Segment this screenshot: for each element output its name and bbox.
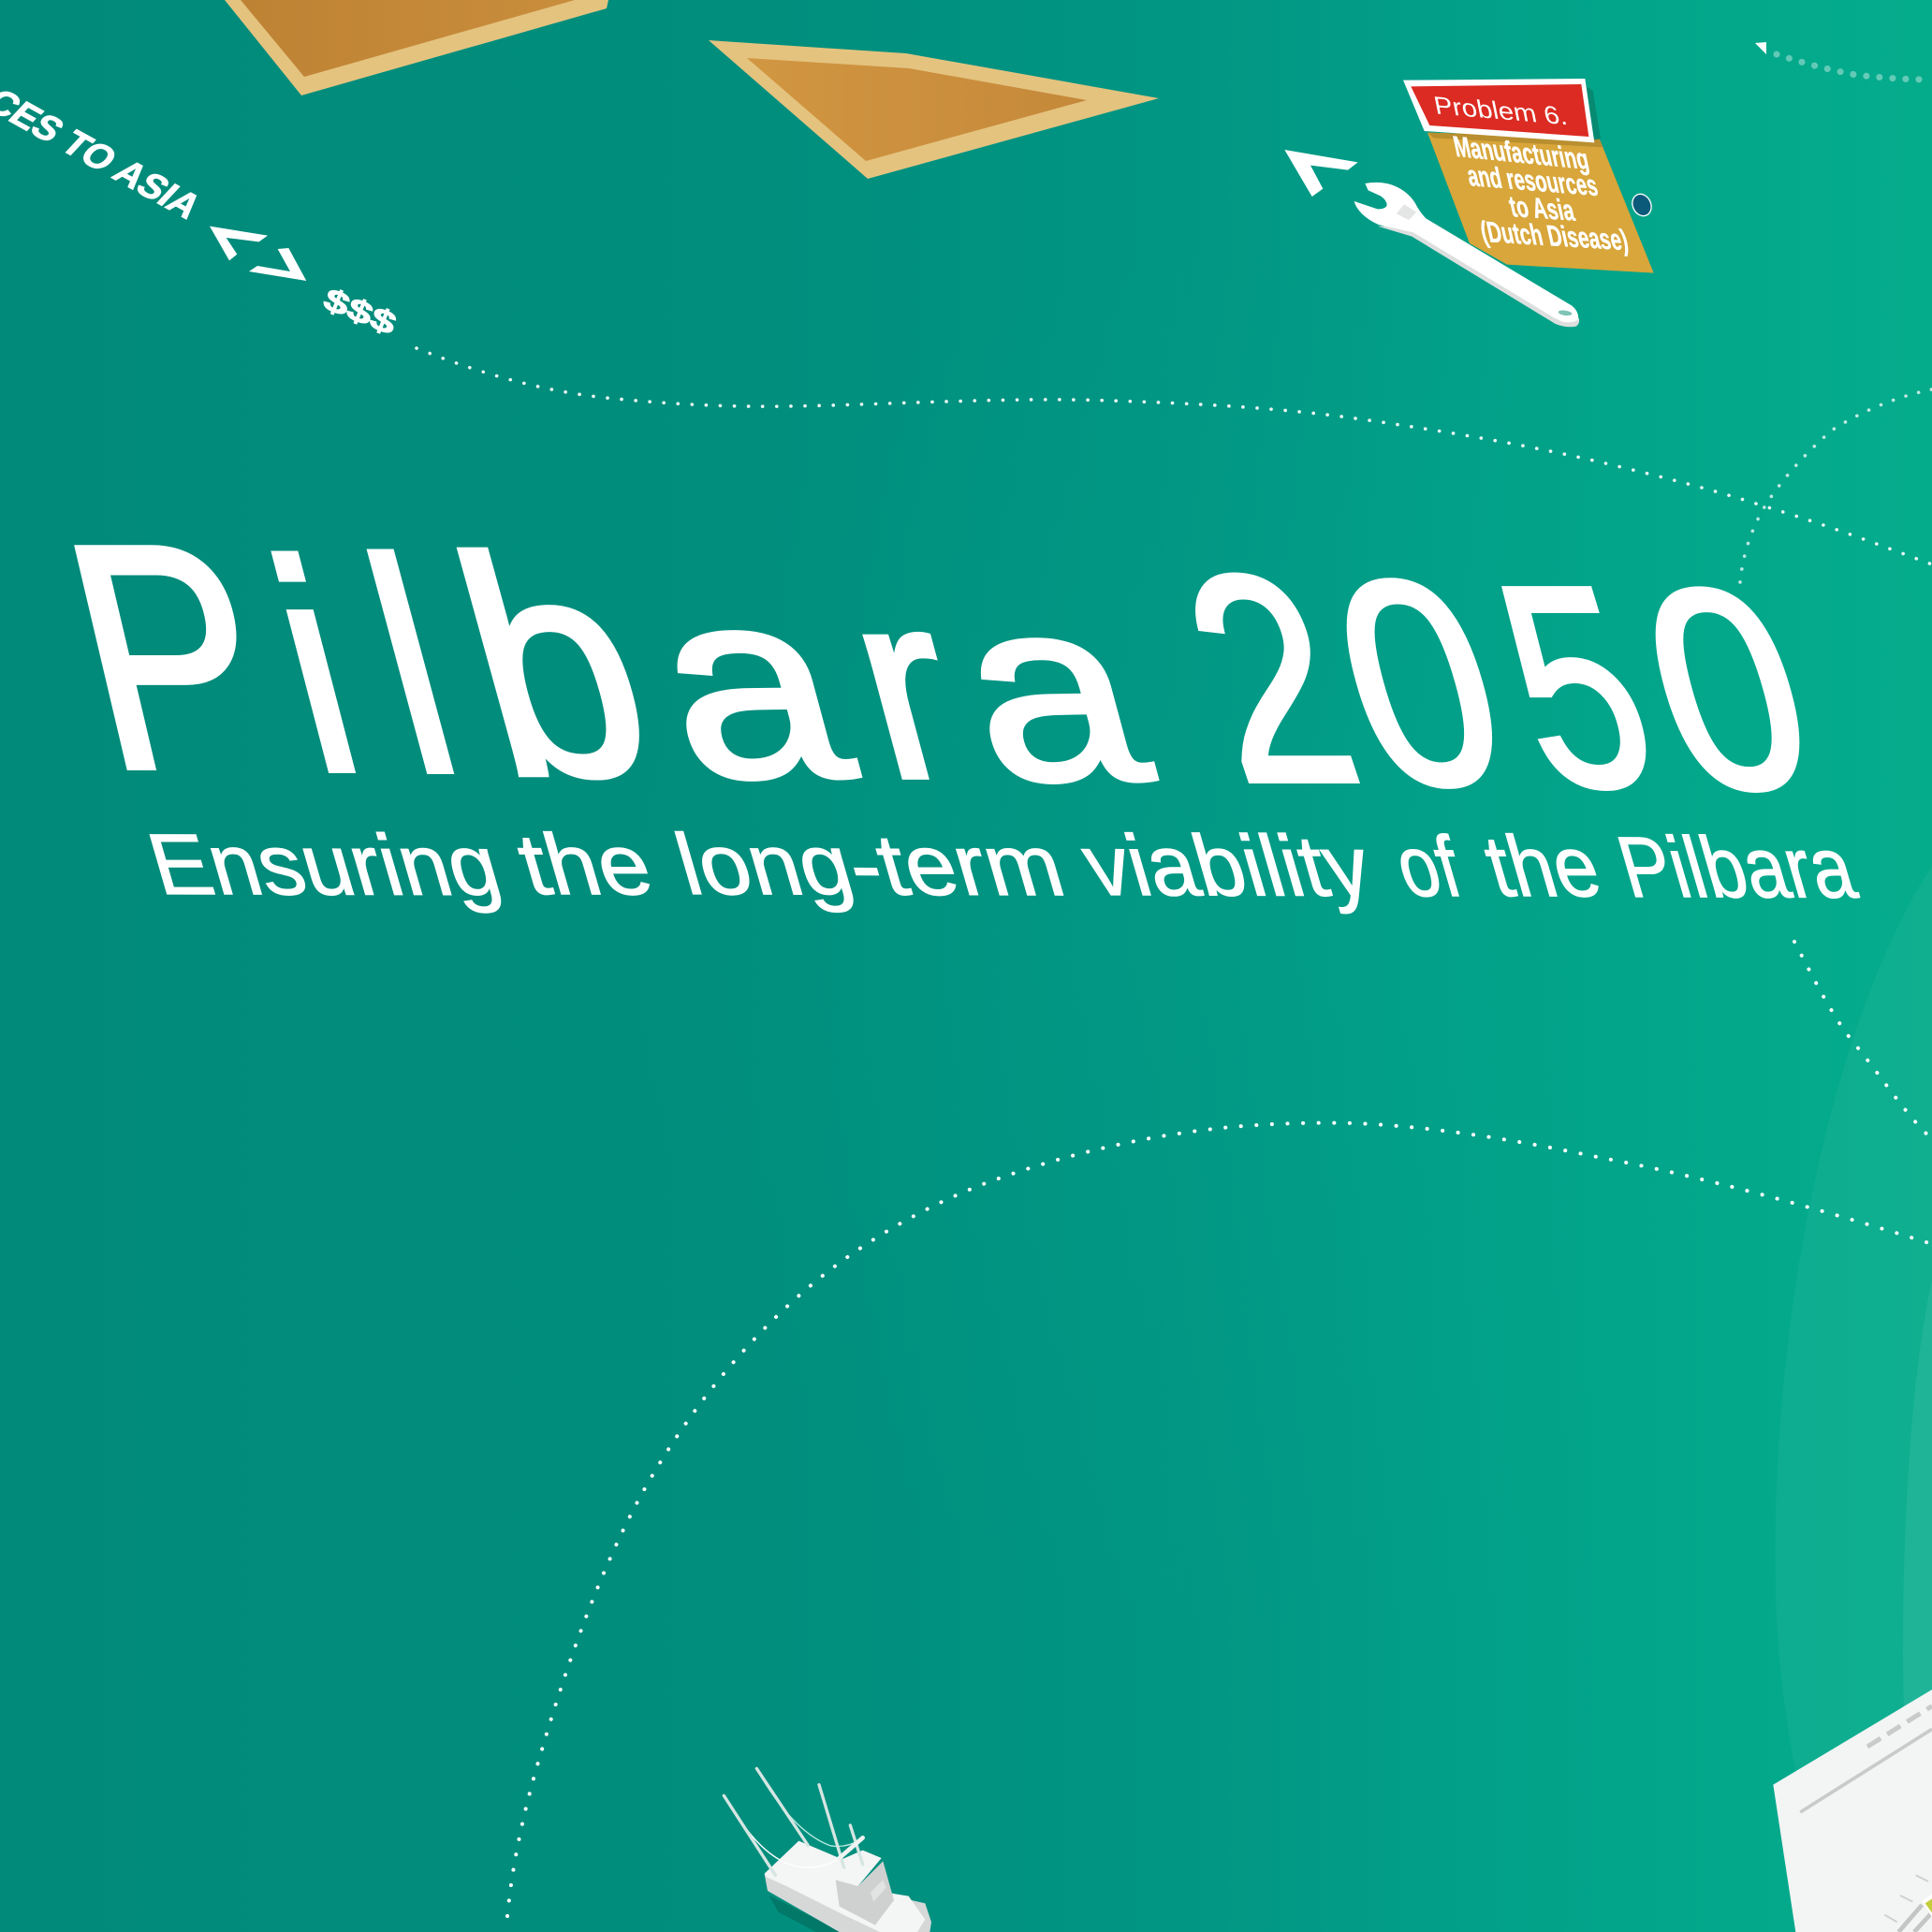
title: 5 <box>1468 528 1686 846</box>
masts and rigging <box>724 1768 863 1875</box>
dotted route: top right with arrowhead <box>1755 42 1932 80</box>
title: a <box>624 535 876 834</box>
dotted route: top <box>417 348 1932 564</box>
title: i <box>243 500 386 834</box>
subtitle: viability <box>1072 817 1382 914</box>
land shape: left gold plateau <box>225 0 608 95</box>
road dashes <box>1867 1706 1932 1747</box>
boat shadow <box>769 1895 842 1932</box>
cabin front <box>836 1861 894 1925</box>
subtitle: of <box>1384 818 1471 915</box>
subtitle: the <box>507 816 663 913</box>
card header shadow <box>1427 133 1603 147</box>
label: dollars: $$$ <box>318 282 402 343</box>
title: 0 <box>1613 532 1842 848</box>
header red <box>1411 84 1588 137</box>
title: 2 <box>1149 515 1390 843</box>
title: l <box>338 498 485 836</box>
panel: problem 6 with wrench <box>1284 79 1655 327</box>
dotted route: big arc <box>507 1123 1932 1916</box>
hull side <box>765 1874 931 1932</box>
header white frame <box>1403 79 1594 142</box>
icon: wrench <box>1354 183 1579 327</box>
title: a <box>929 546 1173 834</box>
icon: blue dot <box>1629 191 1655 219</box>
cabin top <box>835 1851 882 1886</box>
subtitle: Pilbara <box>1607 819 1866 915</box>
card text <box>1450 129 1632 256</box>
deck <box>765 1841 925 1932</box>
roads <box>1898 1905 1932 1932</box>
card text: to Asia <box>1506 189 1577 227</box>
icon: chevron <box>1284 150 1358 197</box>
subtitle: the <box>1474 818 1611 915</box>
subtitle: long-term <box>665 816 1075 914</box>
land shape: right gold plateau <box>709 40 1159 179</box>
road line <box>1800 1729 1932 1812</box>
subtitle: Ensuring <box>138 816 511 914</box>
card text: and resources <box>1464 159 1601 202</box>
yellow marker <box>1922 1894 1932 1917</box>
dotted route: upper right curve <box>1740 389 1932 582</box>
header side shadow <box>1585 86 1601 139</box>
card text: (Dutch Disease) <box>1477 214 1632 256</box>
pale glow circle: outer <box>1776 866 1932 1932</box>
title: P <box>40 479 297 835</box>
panel: white map plane <box>1773 1690 1932 1932</box>
gold card <box>1427 133 1654 273</box>
dotted route: right diagonal <box>1794 942 1932 1139</box>
title: r <box>822 537 986 833</box>
card text: Manufacturing <box>1450 129 1592 176</box>
title <box>40 479 1842 848</box>
ticks <box>1884 1875 1928 1922</box>
icon: fishing boat <box>724 1768 931 1932</box>
icon: double chevron <box>210 227 306 281</box>
title: 0 <box>1303 521 1536 845</box>
pale glow circle: inner <box>1903 1281 1932 1932</box>
cabin window <box>871 1880 886 1902</box>
title: b <box>426 495 682 841</box>
subtitle <box>138 816 1866 915</box>
header text: Problem 6. <box>1431 92 1570 130</box>
